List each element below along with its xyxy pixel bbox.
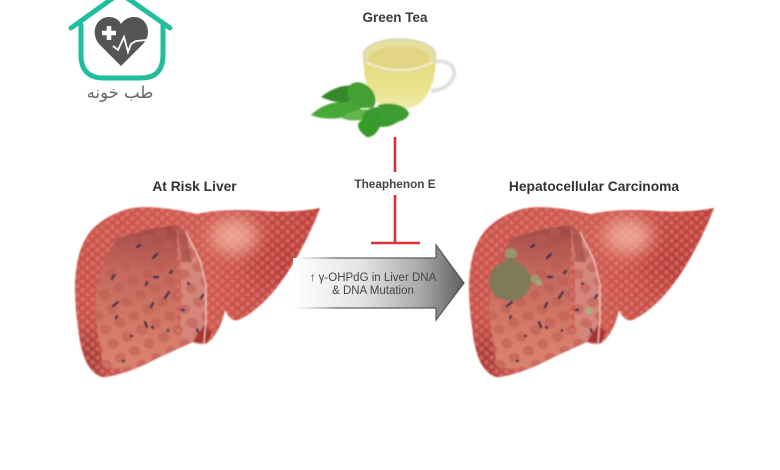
logo: house with heart [71, 0, 170, 103]
logo text: طب خونه [87, 83, 153, 103]
liver: at risk [70, 200, 325, 390]
label: Theaphenon E: Theaphenon E [354, 177, 436, 191]
icon: heart with cross and pulse [95, 17, 148, 66]
arrow text: ↑ γ-OHPdG in Liver DNA [310, 272, 437, 284]
tumour [489, 248, 592, 314]
heading: green tea: Green Tea [362, 10, 428, 25]
text: & DNA Mutation [332, 285, 414, 297]
tea cup body [363, 55, 436, 109]
heading: hepatocellular carcinoma: Hepatocellular Carcinoma [509, 179, 679, 194]
icon: house outline [71, 0, 170, 78]
arrow: progression to carcinoma [293, 245, 464, 320]
inhibition line: T-bar [371, 195, 420, 243]
heading: at risk liver: At Risk Liver [152, 179, 237, 194]
icon: green tea cup with leaves [311, 39, 454, 137]
inhibition line: upper segment [394, 137, 396, 172]
liver: hepatocellular carcinoma with tumour [464, 200, 719, 390]
mint leaves [311, 82, 409, 137]
tea cup handle [431, 61, 454, 91]
